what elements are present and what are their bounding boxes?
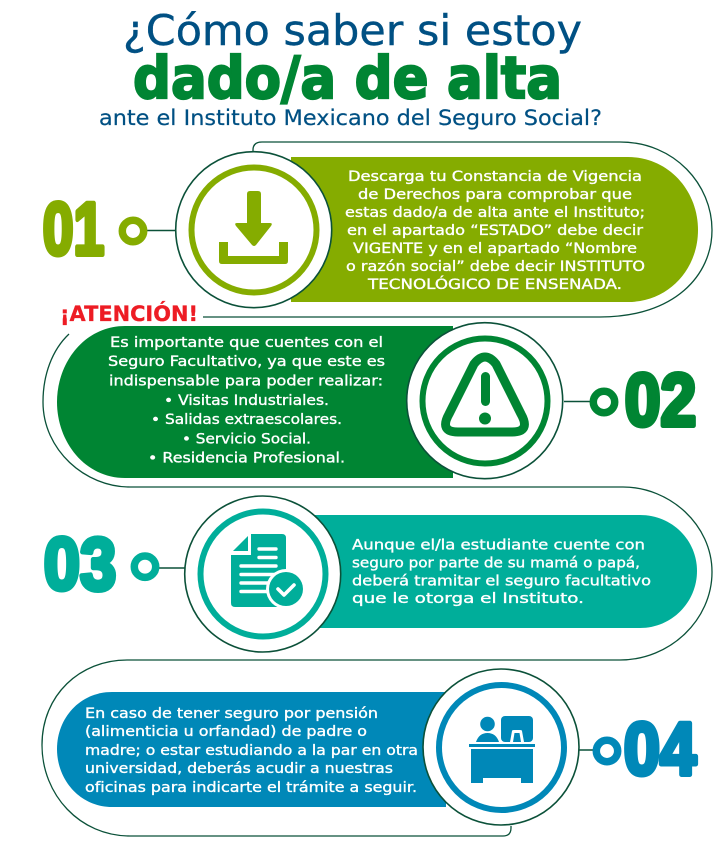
text block 3: seguro por parte de su mamá o papá, — [352, 556, 640, 572]
text block 3: que le otorga el Instituto. — [352, 591, 584, 607]
connector node 4 — [578, 740, 618, 762]
title: ¿Cómo saber si estoy — [123, 6, 582, 55]
panel: step 1 — [43, 152, 698, 308]
text block 4 — [85, 706, 418, 796]
title — [99, 6, 602, 130]
icon: warning in circle — [407, 323, 563, 479]
text block 4: universidad, deberás acudir a nuestras — [85, 761, 393, 777]
text block 4: madre; o estar estudiando a la par en otra — [85, 743, 418, 759]
panel background 1 — [291, 157, 698, 302]
text block 3 — [352, 538, 651, 607]
panel: step 3 — [44, 496, 697, 652]
text block 1: de Derechos para comprobar que — [358, 187, 632, 203]
icon: document with check in circle — [185, 496, 341, 652]
text block 2: • Residencia Profesional. — [148, 450, 345, 466]
number 04: 04 — [624, 708, 696, 790]
title: ante el Instituto Mexicano del Seguro Social? — [99, 106, 602, 130]
title: dado/a de alta — [133, 44, 562, 112]
panel background 4 — [57, 692, 446, 807]
text block 1: VIGENTE y en el apartado “Nombre — [353, 241, 637, 257]
text block 2: Seguro Facultativo, ya que este es — [108, 354, 385, 370]
connector node 2 — [564, 391, 615, 413]
text block 1: o razón social” debe decir INSTITUTO — [346, 259, 645, 275]
text block 3: deberá tramitar el seguro facultativo — [352, 574, 651, 590]
text block 2: • Servicio Social. — [182, 432, 311, 448]
number 01: 01 — [43, 188, 104, 270]
panel background 3 — [315, 515, 697, 628]
heading: atención: ¡ATENCIÓN! — [60, 301, 198, 326]
connector line: lower loop — [42, 334, 712, 836]
panel: step 2 — [57, 323, 696, 479]
text block 4: (alimenticia u orfandad) de padre o — [85, 724, 367, 740]
text block 2: • Visitas Industriales. — [164, 393, 329, 409]
connector node 1 — [122, 220, 176, 242]
connector node 3 — [134, 556, 185, 577]
connector line: upper loop — [203, 142, 712, 317]
text block 1 — [345, 169, 645, 293]
text block 4: oficinas para indicarte el trámite a seguir. — [85, 780, 417, 796]
text block 4: En caso de tener seguro por pensión — [85, 706, 378, 722]
text block 2 — [108, 335, 385, 466]
text block 3: Aunque el/la estudiante cuente con — [352, 538, 645, 554]
icon: person at desk in circle — [423, 669, 579, 825]
text block 1: en el apartado “ESTADO” debe decir — [347, 223, 643, 239]
text block 1: Descarga tu Constancia de Vigencia — [348, 169, 642, 185]
text block 2: indispensable para poder realizar: — [109, 374, 383, 390]
number 03: 03 — [44, 522, 116, 606]
text block 1: TECNOLÓGICO DE ENSENADA. — [367, 275, 622, 293]
text block 1: estas dado/a de alta ante el Instituto; — [345, 205, 645, 221]
panel: step 4 — [57, 669, 696, 825]
panel background 2 — [57, 326, 453, 478]
icon: download in circle — [176, 152, 332, 308]
text block 2: • Salidas extraescolares. — [151, 412, 342, 428]
text block 2: Es importante que cuentes con el — [110, 335, 383, 351]
number 02: 02 — [625, 358, 696, 442]
